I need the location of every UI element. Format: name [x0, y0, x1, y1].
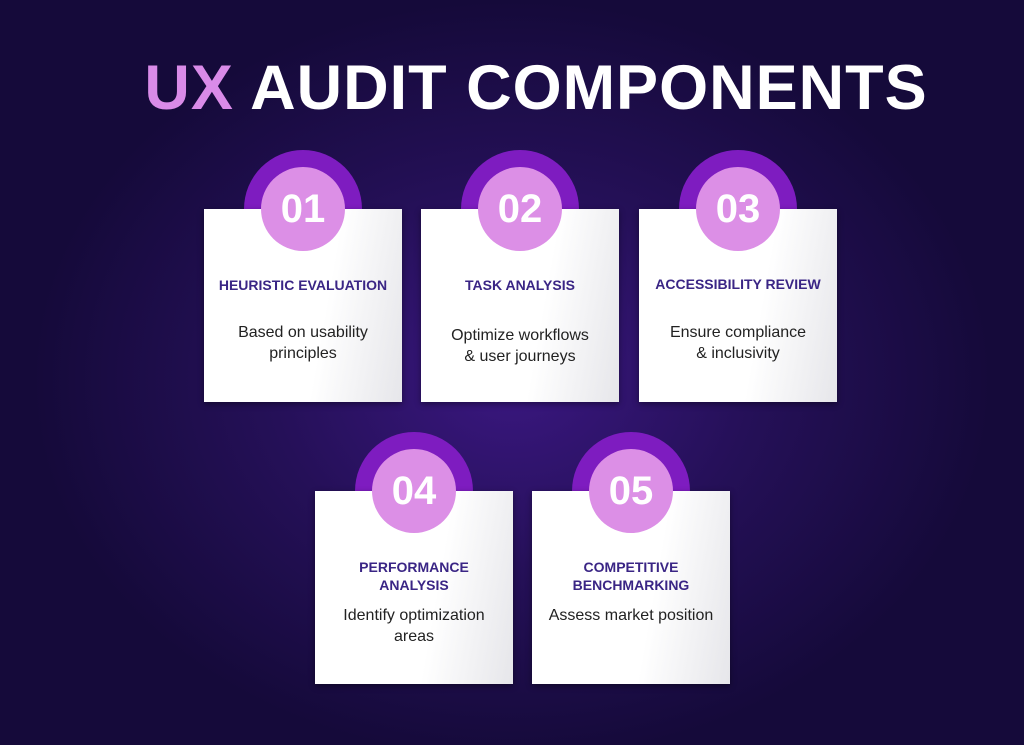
- heading: ACCESSIBILITY REVIEW: [655, 276, 821, 292]
- number 01: 01: [281, 187, 325, 231]
- number 02: 02: [498, 187, 542, 231]
- panel: 03 accessibility review: [636, 150, 839, 406]
- description: Optimize workflows: [451, 327, 589, 344]
- heading: BENCHMARKING: [573, 577, 689, 593]
- panel: 01 heuristic evaluation: [202, 150, 405, 407]
- description: [343, 607, 485, 645]
- heading: HEURISTIC EVALUATION: [219, 277, 387, 293]
- number 03: 03: [716, 187, 760, 231]
- heading: [573, 559, 689, 593]
- panel: 02 task analysis: [418, 150, 622, 407]
- number 04: [372, 449, 456, 533]
- description: & inclusivity: [696, 345, 780, 362]
- number 04: 04: [392, 469, 436, 513]
- description: [670, 324, 806, 362]
- description: [238, 324, 368, 362]
- description: principles: [269, 345, 337, 362]
- description: Ensure compliance: [670, 324, 806, 341]
- description: areas: [394, 628, 434, 645]
- heading: TASK ANALYSIS: [465, 277, 575, 293]
- title: UX AUDIT COMPONENTS: [144, 53, 928, 123]
- heading: [359, 559, 469, 593]
- description: & user journeys: [464, 348, 576, 365]
- number 05: 05: [609, 469, 653, 513]
- description: Identify optimization: [343, 607, 485, 624]
- panel: 05 competitive benchmarking: [530, 432, 732, 688]
- heading: PERFORMANCE: [359, 559, 469, 575]
- number 03: [696, 167, 780, 251]
- description: Assess market position: [549, 607, 713, 624]
- heading: ANALYSIS: [379, 577, 449, 593]
- number 02: [478, 167, 562, 251]
- panel: 04 performance analysis: [312, 432, 516, 688]
- number 01: [261, 167, 345, 251]
- number 05: [589, 449, 673, 533]
- description: [451, 327, 589, 365]
- description: Based on usability: [238, 324, 368, 341]
- heading: COMPETITIVE: [584, 559, 678, 575]
